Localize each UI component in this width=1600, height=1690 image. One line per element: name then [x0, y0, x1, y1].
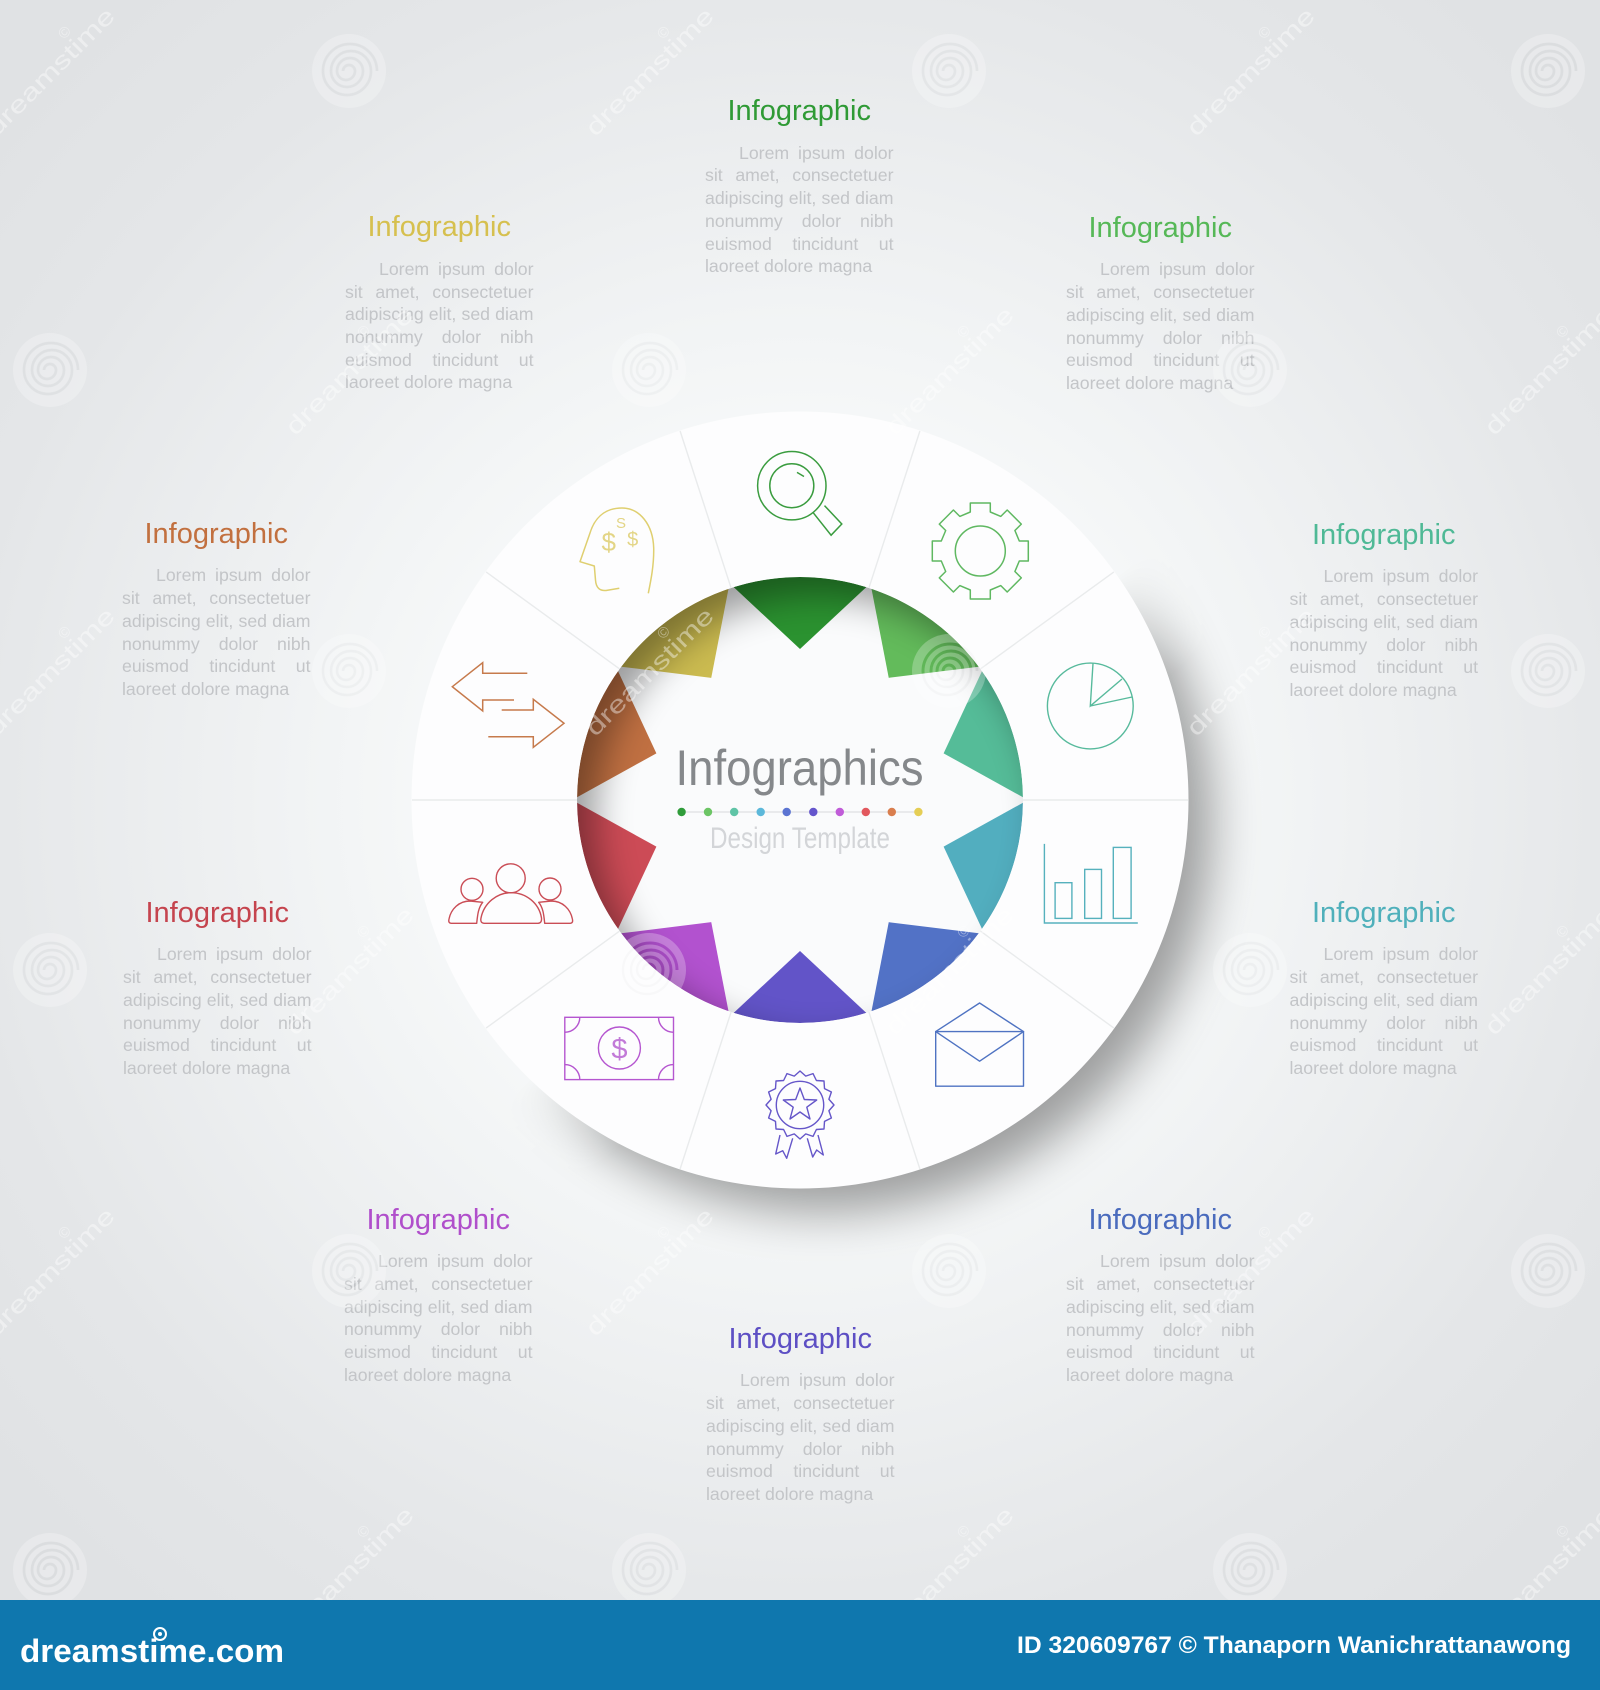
label: top green: adipiscing elit, sed diam — [705, 188, 894, 208]
label: purple: laoreet dolore magna — [344, 1365, 511, 1385]
watermark overlay: dreamstime — [580, 602, 720, 742]
watermark overlay: © — [954, 322, 974, 342]
watermark overlay: © — [654, 1223, 674, 1243]
label: teal: euismod tincidunt ut — [1290, 657, 1478, 677]
watermark overlay: © — [354, 922, 374, 942]
label: blue: sit amet, consectetuer — [1066, 1274, 1254, 1294]
label: cyan: laoreet dolore magna — [1290, 1058, 1457, 1078]
icon: magnifier — [758, 452, 842, 535]
icon: head with dollars: $ — [627, 529, 638, 551]
label: top green: sit amet, consectetuer — [705, 165, 894, 185]
label: purple: sit amet, consectetuer — [344, 1274, 532, 1294]
icon: banknote: $ — [611, 1034, 627, 1066]
watermark overlay: © — [1553, 322, 1573, 342]
label: brown: nonummy dolor nibh — [122, 634, 310, 654]
label: top green: laoreet dolore magna — [705, 256, 872, 276]
label: yellow: sit amet, consectetuer — [345, 282, 534, 302]
icon: people — [449, 864, 573, 923]
label: purple: Infographic — [366, 1204, 510, 1236]
label: purple: euismod tincidunt ut — [344, 1342, 532, 1362]
watermark overlay: dreamstime — [880, 1501, 1020, 1641]
label: top green: euismod tincidunt ut — [705, 234, 894, 254]
icon: pie chart — [1047, 663, 1133, 749]
wedge: teal — [923, 668, 1033, 816]
label: brown: Lorem ipsum dolor — [156, 565, 310, 585]
watermark overlay: dreamstime — [1479, 1501, 1600, 1641]
label: red: laoreet dolore magna — [123, 1058, 290, 1078]
label: cyan: euismod tincidunt ut — [1290, 1035, 1478, 1055]
watermark overlay: © — [1255, 1223, 1275, 1243]
label: cyan — [1290, 897, 1478, 1078]
watermark overlay: dreamstime — [1181, 1202, 1321, 1342]
label: cyan: Lorem ipsum dolor — [1324, 944, 1478, 964]
label: yellow — [345, 211, 534, 392]
label: red: adipiscing elit, sed diam — [123, 990, 312, 1010]
watermark overlay: © — [954, 1522, 974, 1542]
watermark overlay: dreamstime — [880, 301, 1020, 441]
wedge: green — [734, 577, 866, 649]
label: indigo: nonummy dolor nibh — [706, 1439, 894, 1459]
watermark overlay: © — [654, 23, 674, 43]
wedge: brown — [567, 668, 677, 816]
label: lime: Lorem ipsum dolor — [1100, 259, 1254, 279]
center subtitle: Design Template — [710, 822, 890, 855]
wedge: yellow — [615, 581, 765, 717]
footer banner — [0, 1600, 1600, 1690]
label: indigo: Lorem ipsum dolor — [740, 1370, 894, 1390]
dotted divider — [677, 808, 923, 816]
wedge: cyan — [923, 784, 1033, 932]
watermark overlay: © — [354, 322, 374, 342]
label: top green: Infographic — [728, 95, 871, 127]
wedge: blue — [835, 883, 985, 1019]
label: yellow: nonummy dolor nibh — [345, 327, 534, 347]
watermark overlay: dreamstime — [280, 901, 420, 1041]
label: blue: euismod tincidunt ut — [1066, 1342, 1254, 1362]
label: indigo: laoreet dolore magna — [706, 1484, 873, 1504]
label: brown: Infographic — [144, 518, 288, 550]
watermark overlay: dreamstime — [580, 2, 720, 142]
label: indigo: Infographic — [728, 1323, 872, 1355]
label: brown: laoreet dolore magna — [122, 679, 289, 699]
icon: head with dollars: S — [616, 515, 626, 532]
label: cyan: Infographic — [1312, 897, 1456, 929]
label: red: nonummy dolor nibh — [123, 1013, 312, 1033]
icon: medal — [766, 1071, 834, 1158]
label: blue: laoreet dolore magna — [1066, 1365, 1233, 1385]
watermark overlay: © — [354, 1522, 374, 1542]
center title: Infographics — [676, 740, 924, 796]
label: red: Lorem ipsum dolor — [157, 944, 312, 964]
label: indigo — [706, 1323, 894, 1504]
watermark overlay: dreamstime — [1479, 901, 1600, 1041]
wedge: indigo — [734, 951, 866, 1023]
icon: exchange arrows — [452, 663, 564, 747]
label: purple: Lorem ipsum dolor — [378, 1251, 532, 1271]
label: teal: adipiscing elit, sed diam — [1290, 612, 1478, 632]
label: yellow: Lorem ipsum dolor — [379, 259, 534, 279]
label: red: Infographic — [146, 897, 289, 929]
label: teal: nonummy dolor nibh — [1290, 635, 1478, 655]
wedge: red — [567, 784, 677, 932]
wedge: purple — [615, 883, 765, 1019]
label: lime: Infographic — [1088, 212, 1232, 244]
label: brown: sit amet, consectetuer — [122, 588, 310, 608]
watermark overlay: dreamstime — [880, 901, 1020, 1041]
label: red: euismod tincidunt ut — [123, 1035, 312, 1055]
label: cyan: sit amet, consectetuer — [1290, 967, 1478, 987]
label: lime: nonummy dolor nibh — [1066, 328, 1254, 348]
label: blue — [1066, 1204, 1254, 1385]
icon: head with dollars: $ — [601, 527, 616, 557]
label: indigo: adipiscing elit, sed diam — [706, 1416, 894, 1436]
watermark overlay: dreamstime — [1479, 301, 1600, 441]
label: teal: Infographic — [1312, 519, 1456, 551]
label: top green: nonummy dolor nibh — [705, 211, 894, 231]
footer logo: dreamstime.com — [20, 1633, 284, 1669]
label: teal: Lorem ipsum dolor — [1324, 566, 1478, 586]
watermark overlay: dreamstime — [280, 301, 420, 441]
label: blue: adipiscing elit, sed diam — [1066, 1297, 1254, 1317]
icon: bar chart — [1044, 844, 1138, 923]
footer credit: ID 320609767 © Thanaporn Wanichrattanawong — [1017, 1632, 1571, 1659]
label: red — [123, 897, 312, 1078]
label: brown: adipiscing elit, sed diam — [122, 611, 310, 631]
white ring — [412, 412, 1188, 1188]
watermark overlay: © — [654, 623, 674, 643]
watermark overlay: dreamstime — [1181, 602, 1321, 742]
icon: head with dollars — [580, 508, 654, 593]
watermark overlay: dreamstime — [280, 1501, 420, 1641]
wedge: lime — [835, 581, 985, 717]
label: top green: Lorem ipsum dolor — [739, 143, 894, 163]
label: purple: nonummy dolor nibh — [344, 1319, 532, 1339]
label: blue: Lorem ipsum dolor — [1100, 1251, 1254, 1271]
watermark overlay: dreamstime — [580, 1202, 720, 1342]
label: blue: nonummy dolor nibh — [1066, 1320, 1254, 1340]
label: blue: Infographic — [1088, 1204, 1232, 1236]
watermark overlay: © — [55, 23, 75, 43]
label: yellow: adipiscing elit, sed diam — [345, 304, 534, 324]
label: lime: adipiscing elit, sed diam — [1066, 305, 1254, 325]
label: yellow: laoreet dolore magna — [345, 372, 512, 392]
watermark overlay: © — [1553, 922, 1573, 942]
watermark overlay: dreamstime — [1181, 2, 1321, 142]
watermark overlay: © — [1255, 23, 1275, 43]
label: teal: laoreet dolore magna — [1290, 680, 1457, 700]
icon: banknote — [565, 1017, 674, 1080]
label: purple: adipiscing elit, sed diam — [344, 1297, 532, 1317]
label: teal: sit amet, consectetuer — [1290, 589, 1478, 609]
icon: gear — [932, 503, 1028, 599]
label: lime — [1066, 212, 1254, 393]
label: purple — [344, 1204, 532, 1385]
colored star wedges — [567, 577, 1033, 1023]
label: brown: euismod tincidunt ut — [122, 656, 310, 676]
watermark overlay: © — [1553, 1522, 1573, 1542]
label: brown — [122, 518, 310, 699]
label: teal — [1290, 519, 1478, 700]
watermark overlay: © — [954, 922, 974, 942]
icon: envelope — [936, 1003, 1024, 1086]
label: indigo: euismod tincidunt ut — [706, 1461, 894, 1481]
watermark overlay: © — [55, 623, 75, 643]
label: cyan: adipiscing elit, sed diam — [1290, 990, 1478, 1010]
label: yellow: euismod tincidunt ut — [345, 350, 534, 370]
label: red: sit amet, consectetuer — [123, 967, 312, 987]
label: indigo: sit amet, consectetuer — [706, 1393, 894, 1413]
label: top green — [705, 95, 894, 276]
watermark overlay: © — [1255, 623, 1275, 643]
hole base — [576, 576, 1024, 1024]
label: yellow: Infographic — [368, 211, 511, 243]
label: lime: euismod tincidunt ut — [1066, 350, 1254, 370]
label: cyan: nonummy dolor nibh — [1290, 1013, 1478, 1033]
label: lime: laoreet dolore magna — [1066, 373, 1233, 393]
label: lime: sit amet, consectetuer — [1066, 282, 1254, 302]
watermark overlay: © — [55, 1223, 75, 1243]
